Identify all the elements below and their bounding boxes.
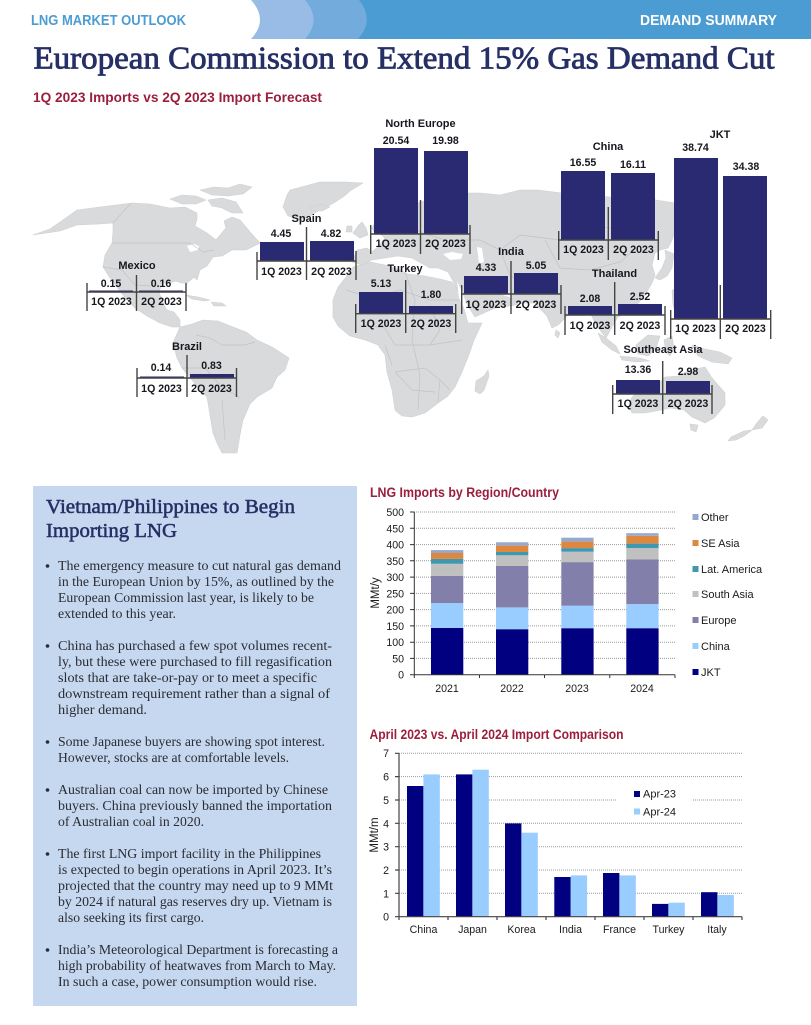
group: Southeast Asia: 13.36 xyxy=(625,364,651,376)
bullet: India xyxy=(46,942,338,989)
bullet: Japan: Some Japanese buyers are showing spot interest. xyxy=(58,734,325,749)
group: JKT: 1Q 2023 xyxy=(675,323,716,335)
x axis labels: France xyxy=(603,924,636,936)
bullet: Japan: However, stocks are at comfortable levels. xyxy=(58,750,289,765)
bullet: China spot: higher demand. xyxy=(58,702,147,717)
group: India: 2Q 2023 xyxy=(516,299,556,311)
world map xyxy=(33,182,768,453)
x axis labels: China xyxy=(410,924,437,936)
group: Thailand: Thailand xyxy=(592,268,637,280)
group: Spain: 4.45 xyxy=(271,228,291,240)
x axis labels: Korea xyxy=(507,924,536,936)
y axis labels: 250 xyxy=(386,588,404,600)
bullet: Japan xyxy=(46,734,325,765)
panel: Vietnam/Philippines sidebar xyxy=(33,486,357,1006)
group: JKT: 2Q 2023 xyxy=(725,323,766,335)
title: European Commission to Extend 15% Gas Demand Cut xyxy=(34,40,775,76)
group: Turkey: 5.13 xyxy=(371,278,391,290)
y axis labels: 500 xyxy=(386,507,404,519)
group: China xyxy=(559,141,658,260)
bullet: EU demand: European Commission last year, is likely to be xyxy=(58,590,314,605)
group: Southeast Asia: 2Q 2023 xyxy=(668,398,708,410)
group: Turkey xyxy=(356,263,456,333)
legend xyxy=(634,788,676,818)
group: Thailand: 2Q 2023 xyxy=(620,320,660,332)
group: North Europe: 2Q 2023 xyxy=(425,238,466,250)
chart heading: LNG imports: LNG Imports by Region/Country xyxy=(370,485,559,500)
header label left: LNG MARKET OUTLOOK xyxy=(31,13,186,29)
group: Spain: 4.82 xyxy=(321,228,341,240)
bullet: Philippines: projected that the country may need up to 9 MMt xyxy=(58,878,333,893)
bars: Apr-23 xyxy=(407,774,717,917)
stacked bar 2023 xyxy=(561,538,594,675)
group: JKT: 34.38 xyxy=(733,161,759,173)
y axis labels: 150 xyxy=(386,621,404,633)
group: Mexico: 0.15 xyxy=(101,278,121,290)
x axis labels: Turkey xyxy=(653,924,685,936)
group: North Europe: 19.98 xyxy=(432,135,459,147)
legend: SE Asia xyxy=(701,538,740,550)
group: India: 5.05 xyxy=(526,260,546,272)
group: North Europe: 1Q 2023 xyxy=(376,238,416,250)
group: Spain: 1Q 2023 xyxy=(261,266,302,278)
bullet: Philippines xyxy=(46,846,333,925)
y axis title: MMt/m xyxy=(369,817,381,853)
y axis labels xyxy=(386,507,404,682)
group: India: 1Q 2023 xyxy=(466,299,506,311)
y axis labels: 50 xyxy=(392,653,404,665)
bullet: EU demand: extended to this year. xyxy=(58,606,176,621)
group: JKT: 38.74 xyxy=(682,142,709,154)
y axis labels xyxy=(383,748,389,924)
group: JKT: JKT xyxy=(710,129,731,141)
legend: JKT xyxy=(701,667,721,679)
y axis labels: 3 xyxy=(383,842,389,854)
x axis labels: 2022 xyxy=(500,683,524,695)
grouped bar chart xyxy=(369,748,742,936)
map section heading: 1Q 2023 Imports vs 2Q 2023 Import Forecast xyxy=(33,90,322,105)
bars: Apr-24 xyxy=(423,770,734,917)
group: North Europe: North Europe xyxy=(385,118,456,130)
bullet: Australian coal: buyers. China previously banned the importation xyxy=(58,798,332,813)
group: Mexico: 2Q 2023 xyxy=(141,296,182,308)
y axis labels: 0 xyxy=(383,912,389,924)
group: JKT xyxy=(671,129,771,339)
group: Turkey: Turkey xyxy=(387,263,424,275)
legend: Apr-23 xyxy=(643,788,676,800)
group: China: China xyxy=(593,141,624,153)
y axis labels: 5 xyxy=(383,795,389,807)
x axis labels: Italy xyxy=(707,924,727,936)
y axis labels: 200 xyxy=(386,605,404,617)
header label right: DEMAND SUMMARY xyxy=(640,13,777,29)
x axis labels xyxy=(410,924,727,936)
group: Brazil: 2Q 2023 xyxy=(191,383,232,395)
bullet: Australian coal: Australian coal can now be imported by Chinese xyxy=(58,782,328,797)
group: Mexico: Mexico xyxy=(118,260,156,272)
stacked bar 2021 xyxy=(431,550,463,675)
legend xyxy=(692,512,763,679)
group: China: 16.55 xyxy=(570,157,596,169)
group: Thailand: 1Q 2023 xyxy=(570,320,610,332)
group: Brazil: Brazil xyxy=(172,341,202,353)
group: India xyxy=(462,246,561,314)
stacked bar 2024 xyxy=(626,533,659,675)
bullet: Philippines: The first LNG import facility in the Philippines xyxy=(58,846,321,861)
bullet: China spot: ly, but these were purchased to fill regasification xyxy=(58,654,332,669)
group: China: 2Q 2023 xyxy=(613,244,654,256)
group: Turkey: 1.80 xyxy=(421,289,441,301)
x axis labels: Japan xyxy=(458,924,487,936)
group: Mexico: 0.16 xyxy=(151,278,171,290)
group: Brazil xyxy=(137,341,236,397)
y axis labels: 350 xyxy=(386,556,404,568)
y axis labels: 300 xyxy=(386,572,404,584)
group: North Europe xyxy=(371,118,470,254)
group: Brazil: 1Q 2023 xyxy=(141,383,182,395)
header band xyxy=(31,0,811,39)
stacked bar 2022 xyxy=(496,542,528,675)
legend: China xyxy=(701,641,731,653)
group: Southeast Asia: Southeast Asia xyxy=(623,344,703,356)
group: Spain xyxy=(257,213,356,280)
group: Mexico xyxy=(87,260,186,311)
group: Brazil: 0.83 xyxy=(201,360,222,372)
bullet: China spot xyxy=(46,638,332,717)
group: Mexico: 1Q 2023 xyxy=(91,296,132,308)
bullet: China spot: China has purchased a few spot volumes recent- xyxy=(58,638,332,653)
bullet: China spot: slots that are take-or-pay or to meet a specific xyxy=(58,670,317,685)
bullet: Australian coal: of Australian coal in 2020. xyxy=(58,814,204,829)
y axis labels: 100 xyxy=(386,637,404,649)
group: Brazil: 0.14 xyxy=(151,362,171,374)
group: Turkey: 2Q 2023 xyxy=(411,318,451,330)
bullet: India: high probability of heatwaves from March to May. xyxy=(58,958,336,973)
x axis labels: 2021 xyxy=(435,683,459,695)
bullet: India: India’s Meteorological Department is forecasting a xyxy=(58,942,338,957)
bullet: Australian coal xyxy=(46,782,332,829)
bullet: China spot: downstream requirement rather than a signal of xyxy=(58,686,331,701)
sidebar heading: Vietnam/Philippines to Begin xyxy=(46,496,295,518)
group: Southeast Asia: 2.98 xyxy=(678,366,698,378)
legend: Lat. America xyxy=(701,564,763,576)
group: Thailand: 2.52 xyxy=(630,291,650,303)
y axis labels: 6 xyxy=(383,772,389,784)
chart heading: April comparison: April 2023 vs. April 2024 Import Comparison xyxy=(370,727,624,742)
y axis title: MMt/y xyxy=(370,577,382,609)
y axis labels: 2 xyxy=(383,865,389,877)
bullet: Philippines: is expected to begin operations in April 2023. It’s xyxy=(58,862,332,877)
bullet: EU demand xyxy=(46,558,341,621)
group: Thailand xyxy=(565,268,665,335)
y axis labels: 7 xyxy=(383,748,389,760)
group: Spain: 2Q 2023 xyxy=(311,266,352,278)
sidebar heading xyxy=(46,496,295,542)
bullet: India: In such a case, power consumption would rise. xyxy=(58,974,317,989)
group: North Europe: 20.54 xyxy=(383,135,409,147)
legend: Other xyxy=(701,512,729,524)
y axis labels: 0 xyxy=(398,670,404,682)
group: Southeast Asia: 1Q 2023 xyxy=(618,398,658,410)
group: India: 4.33 xyxy=(476,262,496,274)
sidebar heading: Importing LNG xyxy=(46,520,177,542)
x axis labels xyxy=(435,683,654,695)
group: Turkey: 1Q 2023 xyxy=(361,318,401,330)
group: Southeast Asia xyxy=(613,344,712,414)
y axis labels: 450 xyxy=(386,523,404,535)
bullet: EU demand: The emergency measure to cut natural gas demand xyxy=(58,558,341,573)
group: China: 1Q 2023 xyxy=(563,244,604,256)
x axis labels: 2023 xyxy=(565,683,589,695)
group: China: 16.11 xyxy=(620,159,646,171)
group: Thailand: 2.08 xyxy=(580,293,600,305)
legend: Europe xyxy=(701,615,736,627)
x axis labels: India xyxy=(559,924,582,936)
x axis labels: 2024 xyxy=(630,683,654,695)
group: India: India xyxy=(498,246,525,258)
bullet: EU demand: in the European Union by 15%, as outlined by the xyxy=(58,574,334,589)
bullet: Philippines: also seeking its first cargo. xyxy=(58,910,204,925)
y axis labels: 4 xyxy=(383,818,389,830)
legend: Apr-24 xyxy=(643,806,676,818)
bullet: Philippines: by 2024 if natural gas reserves dry up. Vietnam is xyxy=(58,894,332,909)
group: Spain: Spain xyxy=(292,213,322,225)
y axis labels: 400 xyxy=(386,540,404,552)
y axis labels: 1 xyxy=(383,888,389,900)
stacked bar chart xyxy=(370,507,763,695)
legend: South Asia xyxy=(701,589,754,601)
